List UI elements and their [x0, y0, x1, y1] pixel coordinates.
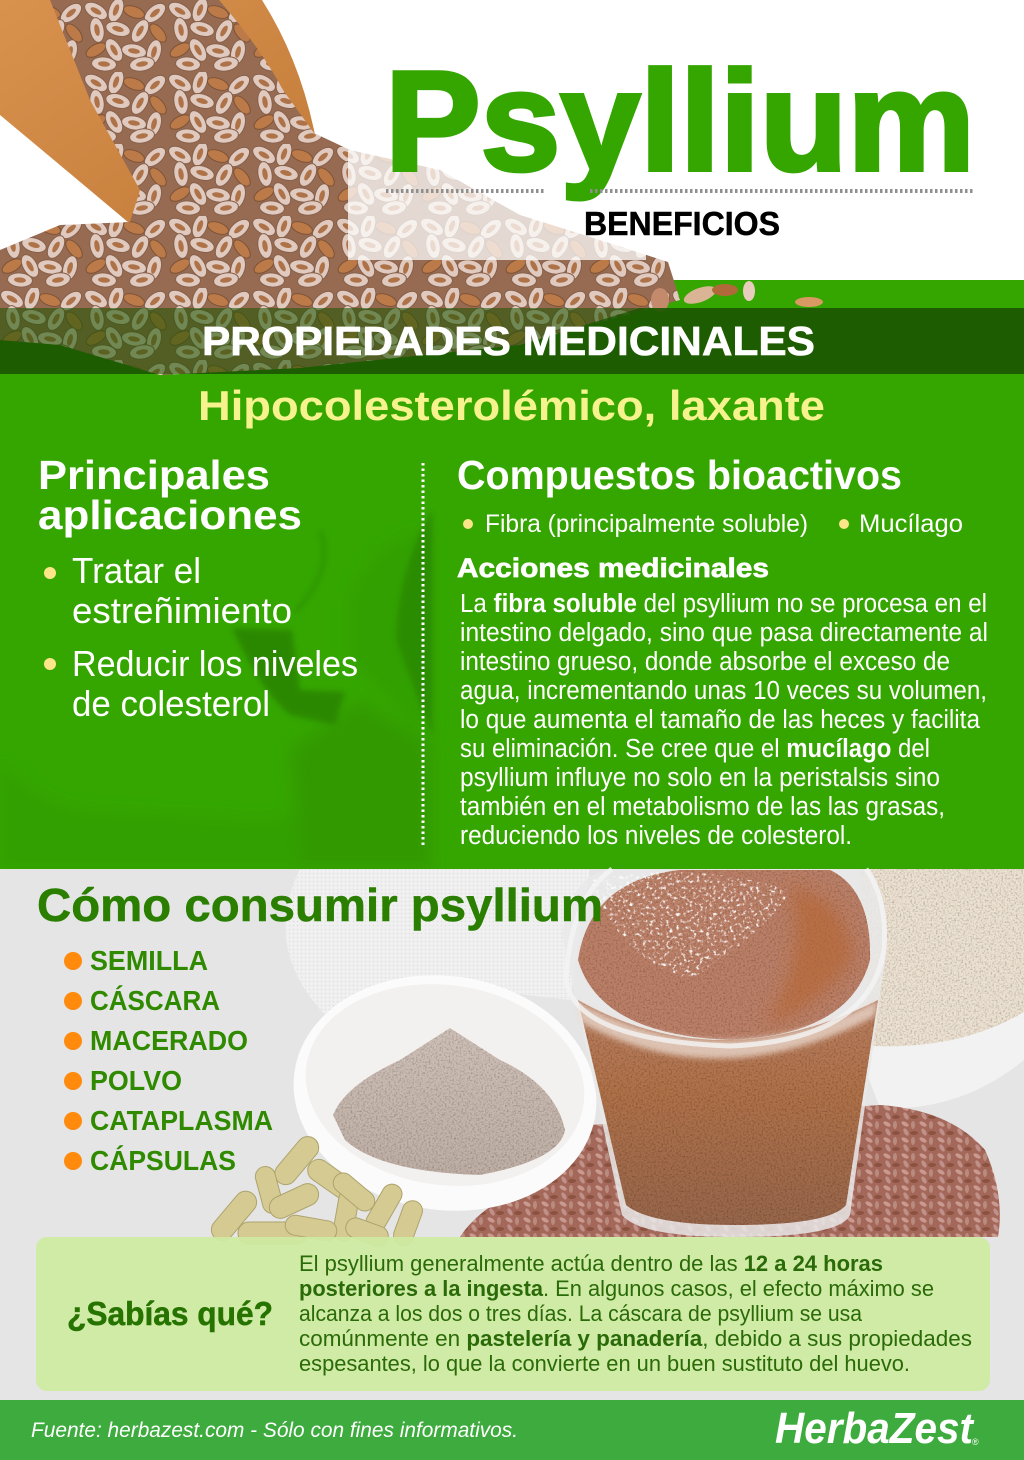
background figure: woman with stomach pain — [0, 510, 432, 870]
compounds list — [463, 510, 963, 538]
body text: intestino delgado, sino que pasa directamente al — [460, 619, 988, 647]
body text: su eliminación. Se cree que el mucílago del — [460, 735, 930, 763]
subheading: medicinal actions: Acciones medicinales — [457, 553, 769, 583]
seed mat — [460, 1105, 1000, 1237]
callout text: El psyllium generalmente actúa dentro de las 12 a 24 horas — [299, 1251, 883, 1276]
image: cloth, bowls, seeds, capsules and glass — [207, 869, 1024, 1249]
body text: intestino grueso, donde absorbe el exceso de — [460, 648, 950, 676]
consumption forms list: MACERADO — [90, 1025, 248, 1056]
consumption forms list — [64, 945, 273, 1176]
image: wooden scoop with psyllium seeds — [0, 0, 823, 375]
bullet list: estreñimiento — [72, 590, 292, 631]
heading: principales aplicaciones: aplicaciones — [38, 492, 302, 538]
glass rim — [566, 869, 885, 1046]
compounds list: Mucílago — [859, 510, 963, 538]
properties line: Hipocolesterolémico, laxante — [198, 382, 825, 429]
grains in band — [0, 308, 640, 375]
consumption forms list: CÁPSULAS — [90, 1145, 236, 1176]
powder — [333, 1028, 565, 1175]
white bowl — [278, 956, 612, 1230]
capsules — [207, 1132, 425, 1249]
heading: principales aplicaciones: Principales — [38, 452, 270, 498]
consumption forms list: CÁSCARA — [90, 985, 220, 1016]
title: Psyllium — [385, 42, 975, 201]
heading: principales aplicaciones — [38, 452, 302, 538]
body text — [460, 590, 988, 850]
bullet list — [44, 550, 358, 724]
bullet list: Tratar el — [72, 550, 201, 591]
brand logo: HerbaZest — [775, 1404, 975, 1453]
loose seeds — [651, 281, 823, 312]
consumption forms list: SEMILLA — [90, 945, 208, 976]
panel: principal applications — [38, 452, 358, 724]
callout text: alcanza a los dos o tres días. La cáscara de psyllium se usa — [299, 1301, 862, 1326]
dark title band — [0, 308, 1024, 374]
green band and medicinal panel — [0, 280, 1024, 870]
dotted rule under the title — [386, 189, 974, 193]
subtitle: BENEFICIOS — [584, 205, 780, 242]
body text: agua, incrementando unas 10 veces su volumen, — [460, 677, 987, 705]
callout text: posteriores a la ingesta. En algunos casos, el efecto máximo se — [299, 1276, 934, 1301]
callout text: comúnmente en pastelería y panadería, debido a sus propiedades — [299, 1326, 972, 1351]
callout text: espesantes, lo que la convierte en un buen sustituto del huevo. — [299, 1351, 910, 1376]
faded seeds overlay — [348, 150, 646, 260]
compounds list: Fibra (principalmente soluble) — [485, 510, 808, 538]
heading: how to consume: Cómo consumir psyllium — [37, 879, 603, 931]
footer — [0, 1400, 1024, 1460]
bullet list: Reducir los niveles — [72, 643, 358, 684]
callout: did you know — [36, 1237, 990, 1391]
callout text — [299, 1251, 972, 1376]
body text: La fibra soluble del psyllium no se procesa en el — [460, 590, 987, 618]
column divider — [422, 463, 424, 848]
body text: lo que aumenta el tamaño de las heces y facilita — [460, 706, 981, 734]
bullet list: de colesterol — [72, 683, 270, 724]
glass — [562, 869, 886, 1237]
cloth — [285, 869, 590, 1020]
body text: reduciendo los niveles de colesterol. — [460, 822, 852, 850]
band heading: PROPIEDADES MEDICINALES — [202, 318, 815, 364]
consumption forms list: CATAPLASMA — [90, 1105, 273, 1136]
source note: Fuente: herbazest.com - Sólo con fines informativos. — [31, 1419, 518, 1442]
heading: compuestos bioactivos: Compuestos bioactivos — [457, 452, 902, 498]
body text: también en el metabolismo de las las grasas, — [460, 793, 945, 821]
consumption forms list: POLVO — [90, 1065, 182, 1096]
panel: bioactive compounds — [457, 452, 988, 850]
body text: psyllium influye no solo en la peristalsis sino — [460, 764, 940, 792]
callout heading: ¿Sabías qué? — [67, 1295, 273, 1332]
right bowl of husk — [850, 1005, 1024, 1108]
registered mark: ® — [972, 1437, 979, 1447]
panel: how to consume background — [0, 869, 1024, 1400]
